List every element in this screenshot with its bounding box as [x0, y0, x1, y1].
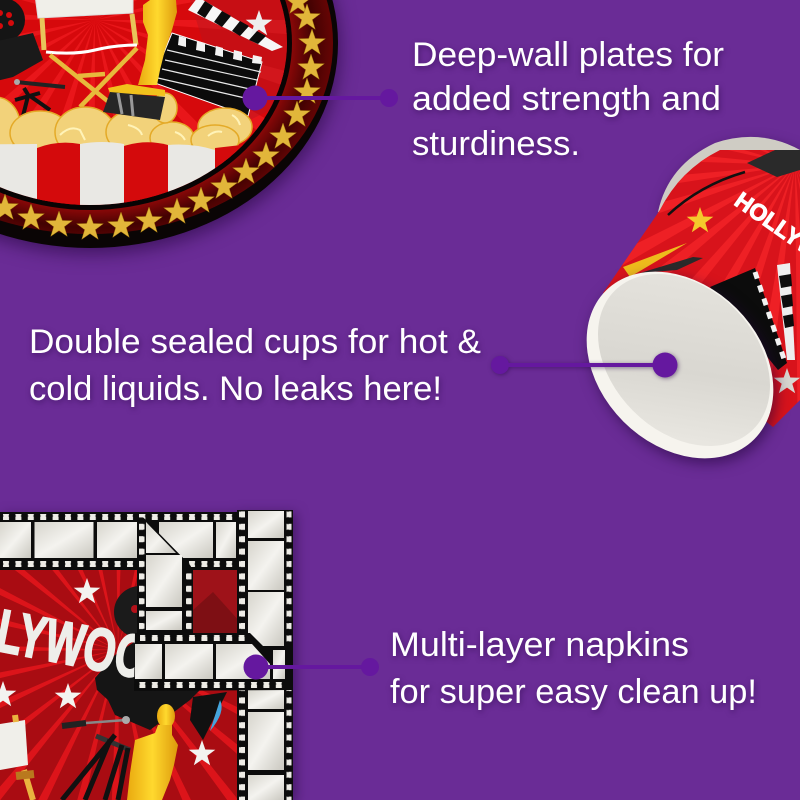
- caption: plates: Deep-wall plates for: [412, 36, 724, 74]
- cup camera: [747, 148, 800, 177]
- napkin chair: [0, 715, 34, 800]
- cup oscar: [623, 243, 687, 277]
- folded window: [193, 570, 250, 633]
- plate artwork: [0, 0, 287, 205]
- caption: napkins: for super easy clean up!: [390, 673, 757, 711]
- caption: plates: sturdiness.: [412, 125, 580, 163]
- caption: cups: Double sealed cups for hot &: [29, 323, 481, 361]
- cup rim: [658, 137, 800, 212]
- film strip: folded vertical: [137, 512, 193, 633]
- cup base: [549, 234, 800, 496]
- caption: napkins: [390, 626, 757, 711]
- cup star: [687, 207, 713, 232]
- napkin oscar: [127, 704, 178, 800]
- director chair: [35, 0, 137, 107]
- striped popcorn box: [0, 142, 244, 205]
- connector: plate: [242, 86, 398, 110]
- popcorn: [0, 93, 252, 157]
- connector: cup: [491, 352, 678, 378]
- napkin red print: [0, 570, 237, 800]
- napkin camera: [62, 586, 227, 800]
- napkin stars: [0, 578, 215, 765]
- caption: cups: cold liquids. No leaks here!: [29, 370, 442, 408]
- film strip: top: [0, 512, 240, 570]
- movie camera: [0, 0, 65, 120]
- clapperboard: [152, 0, 283, 116]
- connector: napkin: [244, 654, 379, 680]
- caption: cups: [29, 323, 481, 408]
- panel: plate: [0, 0, 338, 248]
- oscar statuette: [103, 0, 177, 120]
- panel: napkin: [0, 480, 293, 800]
- caption: plates: added strength and: [412, 80, 721, 118]
- cup body: [603, 150, 800, 427]
- rim stars: [0, 0, 325, 239]
- plate rim: [0, 0, 338, 248]
- caption: napkins: Multi-layer napkins: [390, 626, 689, 664]
- film strip: right: [237, 510, 293, 800]
- caption: plates: [412, 36, 724, 163]
- film strip: folded horizontal: [134, 633, 293, 691]
- cup clapperboard: [710, 268, 787, 370]
- panel: cup: [583, 136, 800, 470]
